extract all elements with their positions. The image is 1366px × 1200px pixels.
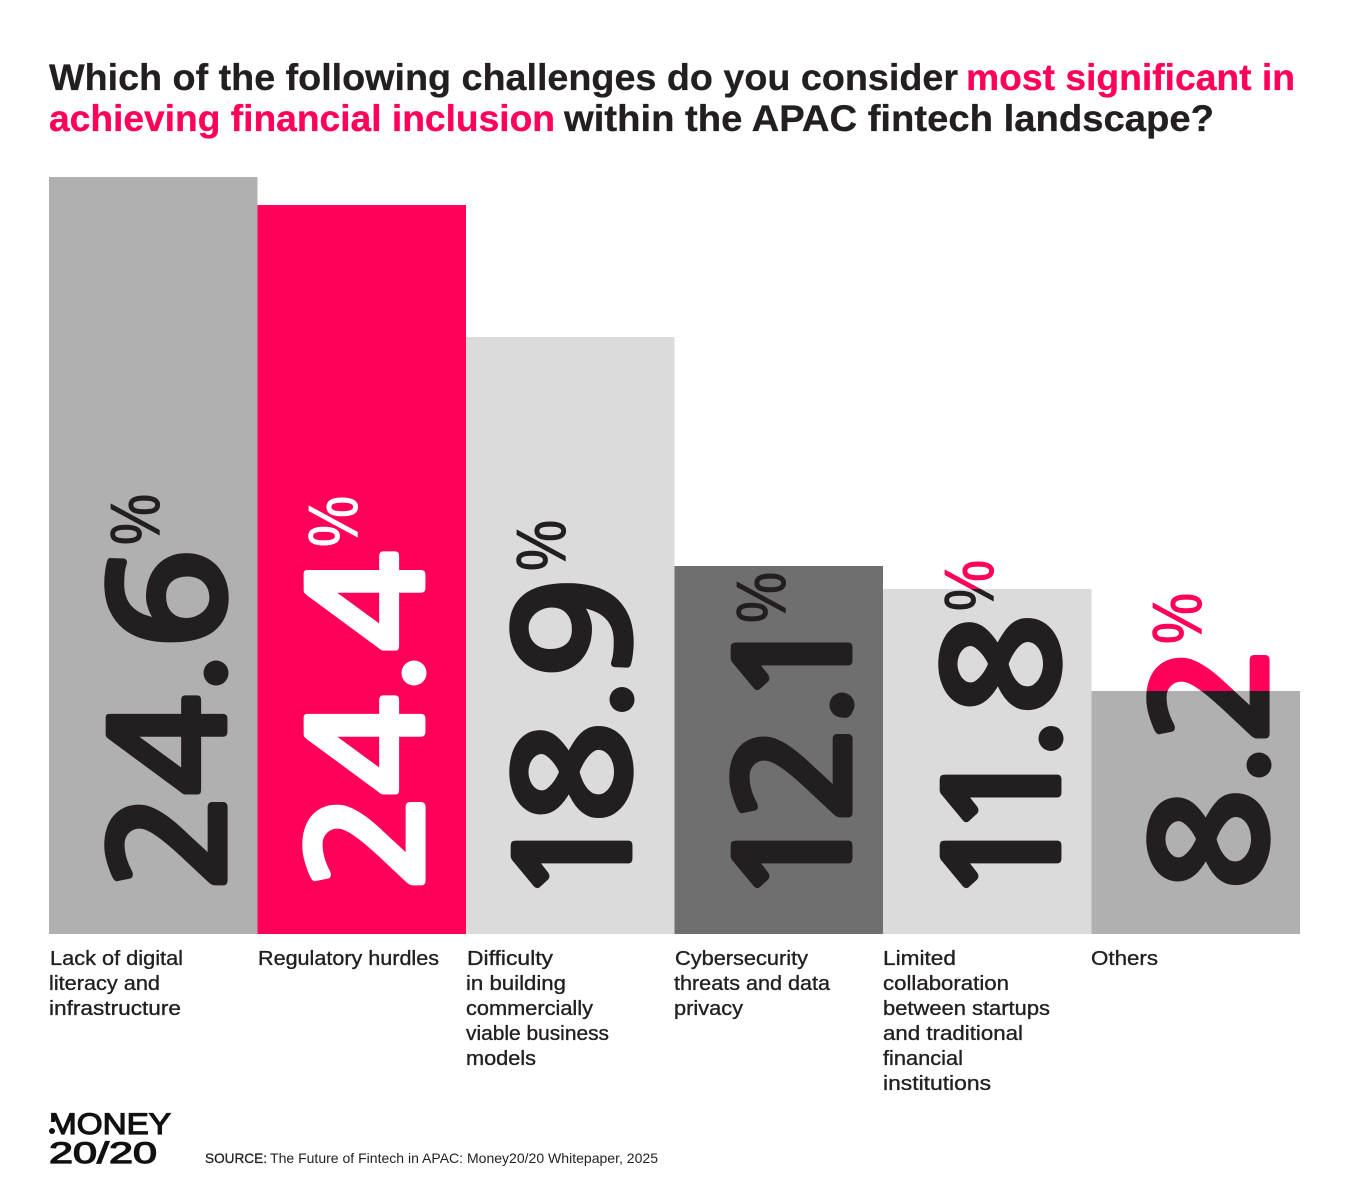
label: limited collaboration: between startups	[883, 998, 1050, 1020]
label: difficulty: in building	[466, 973, 566, 995]
bar: lack of digital literacy 24.6%: 4	[95, 693, 249, 797]
title: Which of the following challenges do you consider	[49, 57, 958, 98]
bar: lack of digital literacy 24.6%: 6	[95, 547, 249, 651]
bar: cybersecurity 12.1%	[674, 566, 883, 934]
bar: cybersecurity 12.1%: .	[788, 698, 857, 722]
label: limited collaboration: financial	[883, 1048, 963, 1070]
logo: Money20/20: MONEY	[49, 1108, 171, 1141]
bar: difficulty in building viable models 18.9%: 9	[500, 576, 654, 680]
source note: SOURCE:	[205, 1150, 267, 1166]
label: limited collaboration: and traditional	[883, 1023, 1023, 1045]
logo: Money20/20	[47, 1108, 171, 1170]
label: difficulty: models	[466, 1048, 536, 1070]
title	[49, 57, 1295, 139]
label: cybersecurity: Cybersecurity	[675, 948, 808, 970]
label: difficulty: commercially	[466, 998, 593, 1020]
bar: regulatory hurdles 24.4%: %	[294, 496, 372, 547]
bar: regulatory hurdles 24.4%: 4	[293, 549, 447, 653]
label: cybersecurity	[674, 948, 831, 1020]
label: difficulty	[466, 948, 609, 1070]
bar: lack of digital literacy 24.6%: %	[96, 494, 174, 545]
label: limited collaboration: Limited	[883, 948, 956, 970]
label: lack of digital literacy: Lack of digital	[50, 948, 183, 970]
title: achieving financial inclusion	[49, 98, 555, 139]
label: regulatory hurdles: Regulatory hurdles	[258, 948, 439, 970]
bar: others 8.2%	[1092, 593, 1300, 934]
bar chart	[49, 177, 1300, 934]
label: lack of digital literacy	[49, 948, 183, 1020]
title: within the APAC fintech landscape?	[563, 98, 1214, 139]
bar: cybersecurity 12.1%: %	[722, 572, 800, 623]
bar: difficulty in building viable models 18.9%: .	[568, 686, 637, 710]
bar: others 8.2%: 8	[1137, 788, 1291, 892]
bar: regulatory hurdles 24.4%	[258, 205, 466, 934]
bar: difficulty in building viable models 18.9%	[466, 337, 674, 934]
logo: Money20/20: 20/20	[49, 1137, 157, 1170]
label: cybersecurity: threats and data	[674, 973, 831, 995]
bar: difficulty in building viable models 18.9%: %	[502, 520, 580, 571]
label: lack of digital literacy: literacy and	[49, 973, 160, 995]
bar: difficulty in building viable models 18.9%: 1	[500, 804, 654, 908]
title: most significant in	[966, 57, 1295, 98]
bar: others 8.2%: .	[1205, 756, 1274, 780]
bar: regulatory hurdles 24.4%: .	[361, 659, 430, 683]
bar: regulatory hurdles 24.4%: 2	[293, 789, 447, 893]
label: limited collaboration: collaboration	[883, 973, 1009, 995]
bar: limited collaboration 11.8%: 8	[929, 613, 1083, 717]
bar: lack of digital literacy 24.6%	[49, 177, 258, 934]
bar: cybersecurity 12.1%: 1	[720, 804, 874, 908]
label: limited collaboration: institutions	[883, 1073, 991, 1095]
bar: limited collaboration 11.8%: 1	[929, 738, 1083, 842]
label: difficulty: viable business	[466, 1023, 609, 1045]
label: others: Others	[1091, 948, 1158, 970]
bar: difficulty in building viable models 18.9%: 8	[500, 721, 654, 825]
bar: limited collaboration 11.8%: %	[930, 560, 1008, 611]
label: cybersecurity: privacy	[674, 998, 743, 1020]
label: limited collaboration	[883, 948, 1050, 1095]
bar: cybersecurity 12.1%: 2	[720, 721, 874, 825]
bar: limited collaboration 11.8%	[883, 560, 1092, 934]
bar: others 8.2%: 2	[1137, 642, 1291, 746]
bar: regulatory hurdles 24.4%: 4	[293, 693, 447, 797]
bar: cybersecurity 12.1%: 1	[720, 606, 874, 710]
bar: limited collaboration 11.8%: 1	[929, 804, 1083, 908]
bar: lack of digital literacy 24.6%: 2	[95, 789, 249, 893]
bar: lack of digital literacy 24.6%: .	[163, 659, 232, 683]
label: difficulty: Difficulty	[467, 948, 553, 970]
bar: others 8.2%: %	[1138, 593, 1216, 644]
label: lack of digital literacy: infrastructure	[49, 998, 181, 1020]
bar: limited collaboration 11.8%: .	[997, 723, 1066, 747]
source note: The Future of Fintech in APAC: Money20/20 Whitepaper, 2025	[270, 1150, 658, 1166]
